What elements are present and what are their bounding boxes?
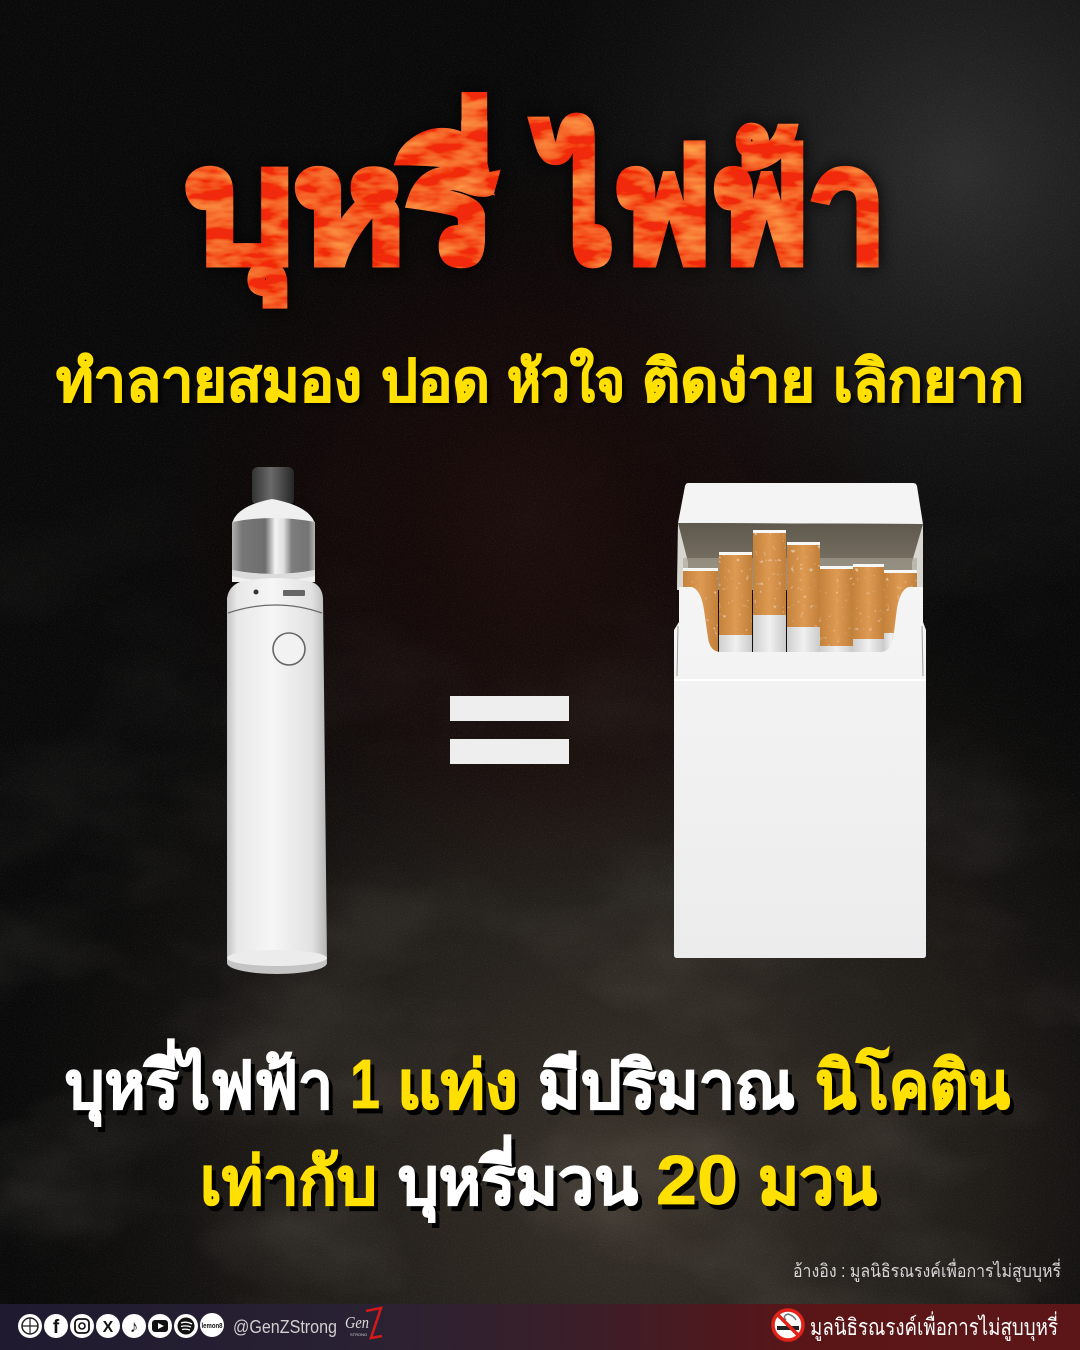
- pack front: [674, 587, 926, 958]
- statement line 1: 1: [350, 1045, 380, 1123]
- statement line 1: แท่ง: [401, 1053, 522, 1127]
- subtitle: หัวใจ: [510, 350, 628, 417]
- icon: open cigarette pack: [674, 483, 926, 958]
- subtitle: ติดง่าย: [645, 352, 818, 417]
- subtitle: เลิกยาก: [833, 349, 1024, 414]
- statement line 2: มวน: [762, 1149, 881, 1223]
- statement line 1: บุหรี่ไฟฟ้า: [65, 1038, 333, 1127]
- title shadow: ไฟฟ้า: [532, 116, 886, 295]
- title lettering: ไฟฟ้า: [532, 116, 886, 295]
- statement line 1: มีปริมาณ: [538, 1048, 795, 1122]
- statement line 1: แท่ง: [397, 1048, 518, 1122]
- social icons: lemon8: [202, 1323, 223, 1330]
- title shadow: บุหรี่: [186, 95, 496, 305]
- social icons: X: [103, 1319, 114, 1336]
- statement line 2: 20: [660, 1146, 742, 1224]
- statement line 2: [200, 1134, 881, 1228]
- subtitle: หัวใจ: [507, 347, 625, 414]
- statement line 2: มวน: [758, 1144, 877, 1218]
- cigarettes: [683, 530, 917, 653]
- subtitle: เลิกยาก: [836, 352, 1027, 417]
- statement line 2: 20: [656, 1141, 738, 1219]
- icon: no smoking: [773, 1310, 803, 1340]
- statement line 2: เท่ากับ: [200, 1144, 377, 1218]
- social icons: f: [53, 1317, 60, 1338]
- subtitle: ปอด: [381, 349, 490, 414]
- pack lid: [678, 483, 923, 524]
- title: บุหรี่ไฟฟ้า: [186, 95, 886, 305]
- handle: @GenZStrong: [233, 1317, 337, 1337]
- title shadow: [186, 95, 886, 305]
- icon: equals sign: [450, 696, 569, 764]
- logo: Gen Z Strong: [345, 1308, 382, 1338]
- subtitle: ทำลายสมอง: [59, 352, 365, 417]
- logo: Gen Z Strong: Gen: [345, 1313, 369, 1332]
- title lettering: บุหรี่: [186, 95, 496, 305]
- icon: e-cigarette device: [227, 467, 327, 974]
- subtitle: ทำลายสมอง: [56, 349, 362, 414]
- statement line 2: บุหรี่มวน: [402, 1139, 642, 1228]
- statement line 1: บุหรี่ไฟฟ้า: [69, 1043, 337, 1132]
- statement line 1: [65, 1038, 1014, 1132]
- subtitle: ติดง่าย: [642, 349, 815, 414]
- statement line 2: บุหรี่มวน: [398, 1134, 638, 1223]
- statement line 1: นิโคติน: [819, 1051, 1014, 1127]
- subtitle: [56, 347, 1027, 417]
- statement line 1: 1: [354, 1050, 384, 1128]
- subtitle: ปอด: [384, 352, 493, 417]
- title lettering: [186, 95, 886, 305]
- statement line 2: เท่ากับ: [204, 1149, 381, 1223]
- footer bar: [0, 1304, 1080, 1350]
- logo: Gen Z Strong: STRONG: [350, 1332, 367, 1337]
- social icons: [18, 1313, 224, 1338]
- statement line 1: มีปริมาณ: [542, 1053, 799, 1127]
- social icons: ♪: [130, 1317, 138, 1336]
- statement line 1: นิโคติน: [815, 1046, 1010, 1122]
